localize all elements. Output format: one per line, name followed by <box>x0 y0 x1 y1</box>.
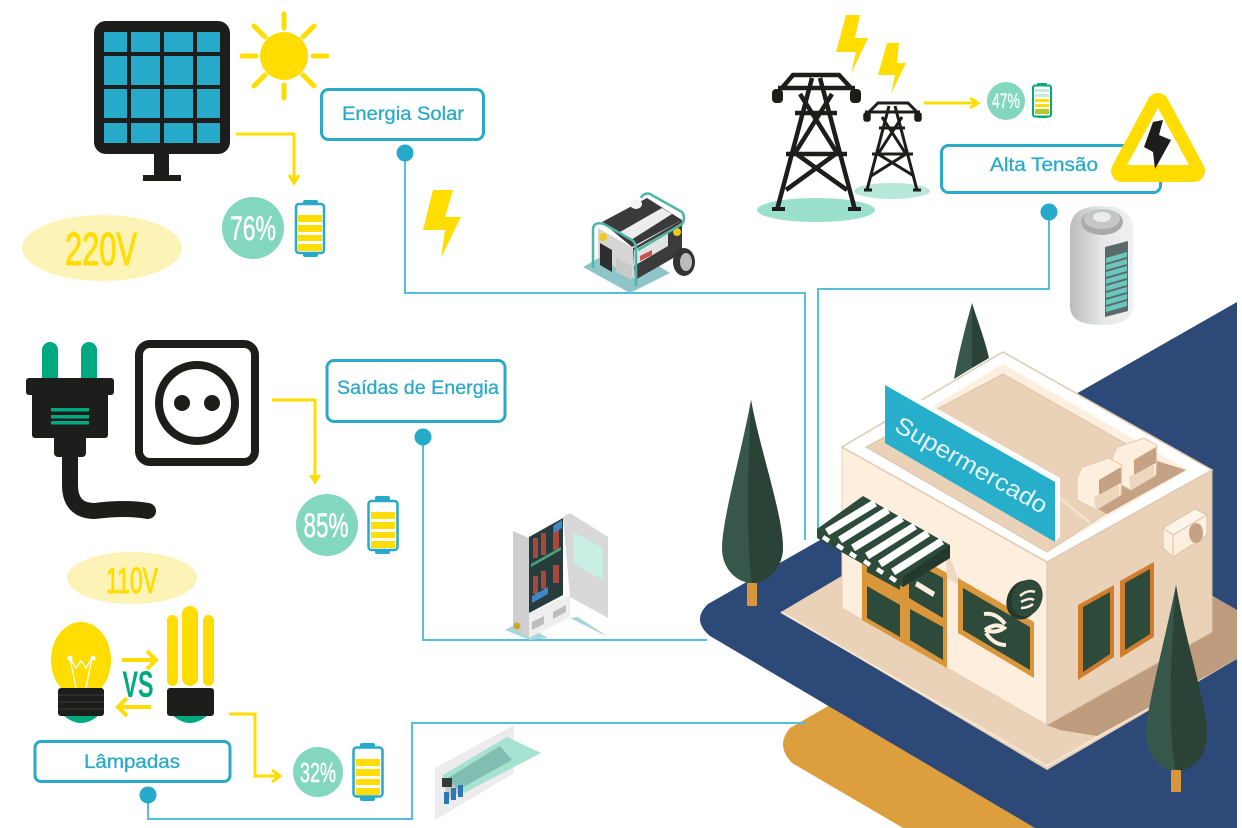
icon: solar panel <box>94 21 230 181</box>
roof AC unit: front <box>1077 458 1122 510</box>
large pylon <box>772 75 861 210</box>
voltage badge: 220V: 220V <box>65 223 137 275</box>
icon: generator <box>583 194 695 293</box>
ground: orange path <box>783 705 1040 828</box>
wall sign: round logo <box>1001 575 1048 625</box>
windows: right wall <box>1078 562 1154 680</box>
roof sign: Supermercado <box>885 382 1060 542</box>
connector dot: Energia Solar <box>396 144 414 162</box>
icon: electrical cabinet <box>505 513 608 640</box>
connector line: Alta Tensão <box>818 212 1049 530</box>
arrow: socket to 85% <box>272 400 321 485</box>
awning <box>817 496 950 587</box>
connector line: Lâmpadas <box>148 723 805 819</box>
roof rim <box>842 352 1212 562</box>
icon: bolt large <box>836 15 868 74</box>
arrow: CFL to bulb <box>118 698 151 716</box>
right wall <box>1047 470 1212 725</box>
roof inner wall <box>866 364 1188 552</box>
icon: breaker panel <box>435 725 541 820</box>
icon: compact fluorescent lamp <box>167 606 214 723</box>
store: base plate <box>781 480 1237 770</box>
icon: socket <box>139 344 255 462</box>
store: back tree <box>954 303 989 379</box>
roof vent line <box>1060 498 1090 523</box>
stat: 76% <box>222 197 284 259</box>
icon: cylinder battery <box>1070 206 1133 325</box>
label: Lâmpadas <box>35 742 230 782</box>
arrow: bulb to CFL <box>122 651 156 669</box>
connector dot: Alta Tensão <box>1040 204 1058 220</box>
awning shadow on wall <box>945 545 961 586</box>
tree: right <box>1146 585 1207 792</box>
icon: bolt small <box>878 43 906 94</box>
ground: navy lot <box>700 302 1237 828</box>
stat: 76%: 76% <box>230 210 276 248</box>
icon: pylons <box>757 75 930 222</box>
label: Energia Solar: Energia Solar <box>342 104 465 125</box>
arrow: pylons to 47% <box>924 98 978 108</box>
icon: lightning bolt <box>423 190 461 258</box>
stat: 85% <box>296 494 358 556</box>
connector line: Saídas de Energia <box>423 437 707 640</box>
arrow: lamps to 32% <box>229 714 280 782</box>
icon: sun <box>242 14 327 98</box>
icon: battery 32% <box>354 743 382 801</box>
store: building <box>817 352 1212 725</box>
connector dot: Lâmpadas <box>140 786 156 804</box>
stat: 32%: 32% <box>300 757 336 788</box>
stat: 85%: 85% <box>304 507 348 545</box>
text: VS: VS <box>122 664 154 705</box>
label: Lâmpadas: Lâmpadas <box>84 752 180 773</box>
store: plate rim <box>781 612 1237 766</box>
icon: plug <box>26 342 148 511</box>
label: Saídas de Energia <box>327 360 505 422</box>
icon: battery 76% <box>296 200 324 257</box>
AC wall unit <box>1163 509 1207 557</box>
roof sign: Supermercado: Supermercado <box>890 412 1052 519</box>
label: Energia Solar <box>322 90 484 140</box>
label: Saídas de Energia: Saídas de Energia <box>337 378 499 399</box>
roof AC unit: back <box>1112 438 1157 490</box>
label: Alta Tensão <box>942 146 1160 192</box>
small pylon <box>864 103 921 190</box>
icon: battery 85% <box>368 496 398 554</box>
voltage badge: 220V <box>22 215 182 281</box>
label: Alta Tensão: Alta Tensão <box>990 155 1098 176</box>
icon: battery 47% <box>1033 83 1051 118</box>
connector dot: Saídas de Energia <box>414 428 432 446</box>
roof shadow <box>1090 460 1186 514</box>
stat: 32% <box>293 747 343 797</box>
window: logo display <box>958 578 1034 678</box>
connector line: Energia Solar <box>405 153 805 540</box>
left wall <box>842 447 1047 725</box>
icon: incandescent bulb <box>51 622 111 723</box>
tree: left <box>722 400 783 606</box>
stat: 47% <box>987 82 1025 120</box>
store: cast shadow <box>1047 596 1237 736</box>
voltage badge: 110V <box>67 552 197 604</box>
roof deck <box>866 374 1172 552</box>
stat: 47%: 47% <box>992 90 1020 113</box>
icon: warning triangle <box>1122 104 1194 171</box>
voltage badge: 110V: 110V <box>106 560 158 601</box>
window pair: left wall <box>862 526 947 668</box>
arrow: solar to 76% <box>236 134 299 183</box>
